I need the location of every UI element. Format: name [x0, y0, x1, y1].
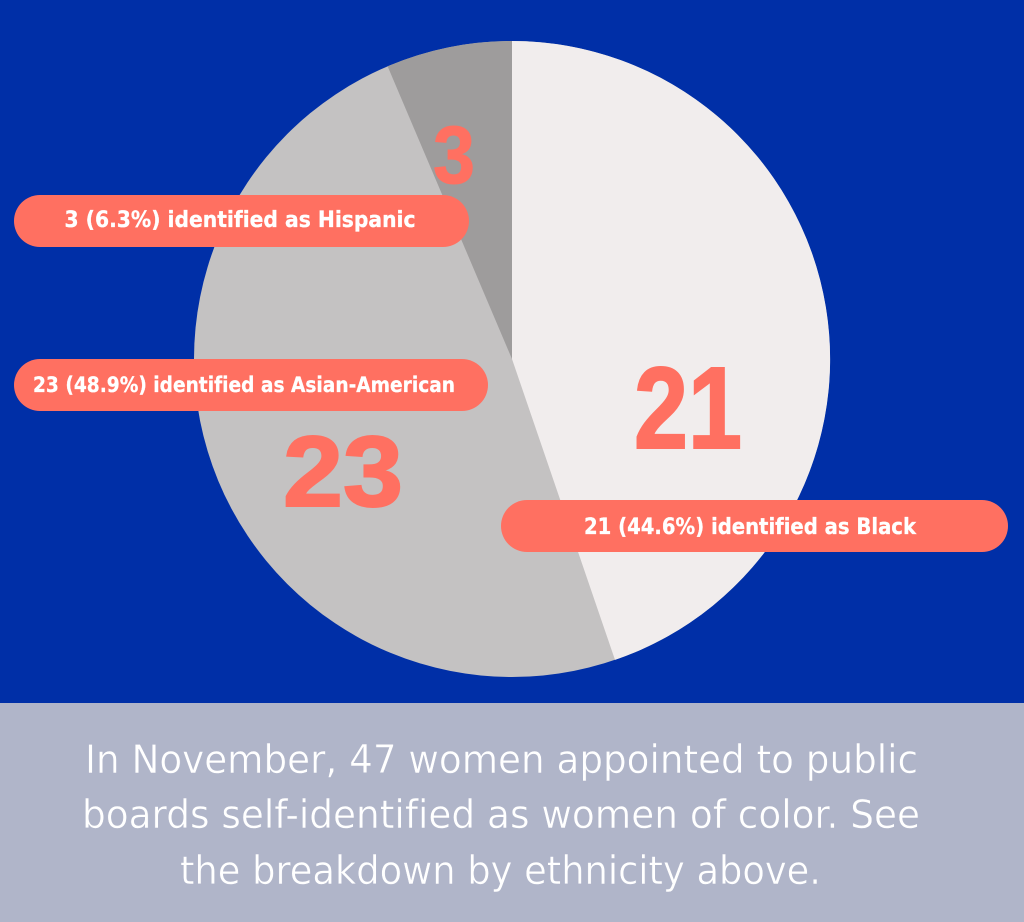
label: Black: 21 (44.6%) identified as Black [584, 515, 917, 540]
label: Black [501, 500, 1008, 552]
pie chart [194, 41, 830, 677]
number 23: 23 [283, 416, 403, 528]
number 21: 21 [634, 343, 742, 473]
label: Hispanic [14, 195, 469, 247]
slice: Asian-American 23 [194, 41, 830, 677]
footer panel [0, 703, 1024, 922]
label: Asian-American [14, 359, 488, 411]
slice: Hispanic 3 [388, 41, 512, 359]
footer text [82, 738, 920, 894]
label: Hispanic: 3 (6.3%) identified as Hispanic [64, 208, 416, 233]
footer text: boards self-identified as women of color. See [82, 793, 920, 838]
footer text: the breakdown by ethnicity above. [180, 849, 821, 894]
number 3: 3 [433, 110, 475, 201]
label: Asian-American: 23 (48.9%) identified as Asian-American [33, 373, 455, 397]
footer text: In November, 47 women appointed to public [85, 738, 918, 783]
slice: Black 21 [512, 41, 830, 660]
